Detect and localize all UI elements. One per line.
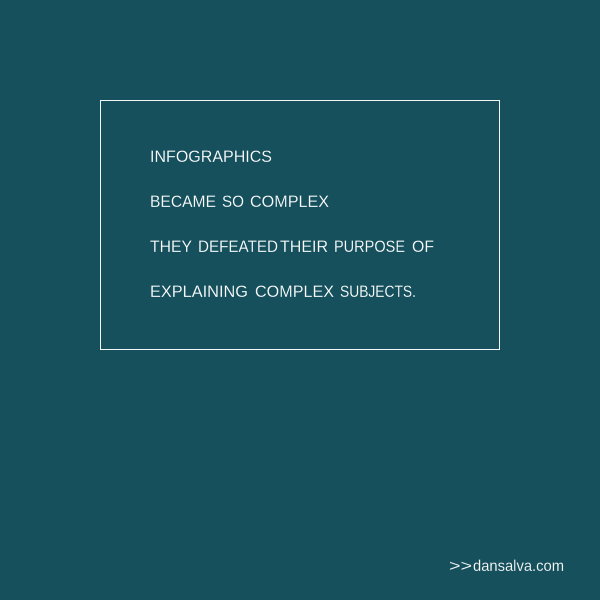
text line 2 [150,193,329,211]
text line 2: COMPLEX [250,193,329,211]
text line 4: EXPLAINING [150,283,248,301]
footer credit: >> [449,558,472,575]
text line 3: PURPOSE [334,238,405,256]
text line 4 [150,283,416,301]
text line 4: COMPLEX [255,283,334,301]
text block: statement [150,148,434,301]
text line 3: THEY [150,238,192,256]
text line 2: SO [222,193,244,211]
text line 2: BECAME [150,193,216,211]
text line 3: THEIR [280,238,328,256]
text line 3 [150,238,434,256]
text line 3: OF [412,238,434,256]
text line 4: SUBJECTS. [340,283,416,301]
panel: outlined frame [100,100,500,350]
text line 3: DEFEATED [198,238,278,256]
footer credit: dansalva.com [473,558,564,575]
text line 1: INFOGRAPHICS [150,148,272,166]
